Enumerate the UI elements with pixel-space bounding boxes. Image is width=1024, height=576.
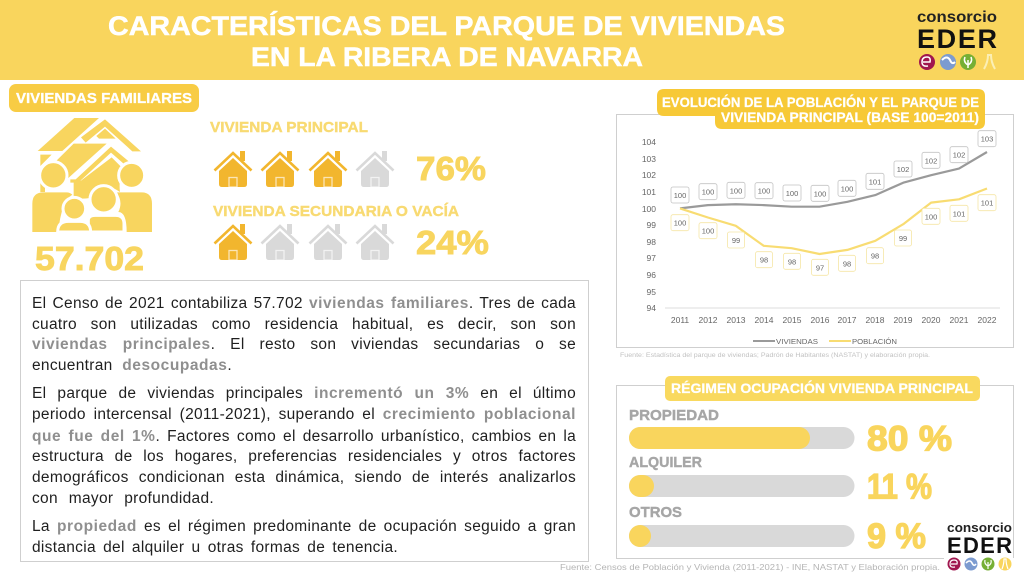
header band	[0, 0, 1024, 80]
bar: alquiler: 11 %	[867, 468, 932, 506]
data labels: viviendas: 100	[674, 191, 686, 200]
label: vivienda secundaria: VIVIENDA SECUNDARIA O VACÍA	[213, 203, 459, 220]
data labels: viviendas: 100	[841, 184, 853, 193]
x axis labels: 2018	[866, 315, 885, 325]
paragraph 2: que fue del 1%. Factores como el desarrollo urbanístico, cambios en la	[32, 428, 576, 445]
chart heading badge	[657, 89, 985, 129]
bar: alquiler: ALQUILER	[629, 454, 702, 471]
y axis labels: 99	[647, 220, 656, 230]
label: vivienda principal: VIVIENDA PRINCIPAL	[210, 119, 368, 136]
badge: viviendas familiares	[9, 84, 199, 112]
data labels: viviendas: 100	[786, 189, 798, 198]
data labels: poblacion: 98	[871, 252, 879, 261]
y axis labels: 96	[647, 270, 656, 280]
paragraph 1: viviendas principales. El resto son viviendas secundarias o se	[32, 336, 576, 353]
paragraph 1	[32, 295, 576, 374]
paragraph 2: con mayor profundidad.	[32, 490, 214, 507]
x axis labels: 2015	[783, 315, 802, 325]
bar: otros: 9 %	[867, 517, 926, 556]
data labels: poblacion: 97	[816, 263, 824, 272]
legend: POBLACIÓN	[852, 337, 897, 346]
line: viviendas	[680, 152, 987, 208]
icons: secondary houses 1 of 4	[214, 224, 394, 260]
regimen heading badge	[665, 376, 980, 401]
value 76%: 76%	[416, 150, 486, 187]
paragraph 3: La propiedad es el régimen predominante de ocupación seguido a gran	[32, 518, 576, 535]
data labels: poblacion: 100	[925, 212, 937, 221]
logo: consorcio EDER footer: EDER	[947, 533, 1012, 558]
y axis labels: 103	[642, 154, 656, 164]
title: EN LA RIBERA DE NAVARRA	[251, 42, 643, 72]
x axis labels: 2020	[922, 315, 941, 325]
logo: consorcio EDER footer	[944, 520, 1014, 575]
y axis labels	[642, 137, 656, 313]
y axis labels: 98	[647, 237, 656, 247]
panel: line chart	[616, 89, 1014, 348]
data labels: viviendas: 103	[981, 135, 993, 144]
data labels: viviendas: 102	[897, 165, 909, 174]
value 24%: 24%	[416, 224, 489, 261]
paragraph 1: cuatro son utilizadas como residencia habitual, es decir, son son	[32, 316, 576, 333]
paragraph 2: periodo intercensal (2011-2021), superando el crecimiento poblacional	[32, 406, 576, 423]
data labels: viviendas: 101	[869, 177, 881, 186]
paragraph 3	[32, 518, 576, 556]
data labels: poblacion: 101	[953, 209, 965, 218]
bar: otros	[629, 504, 926, 556]
x axis labels: 2022	[978, 315, 997, 325]
data labels: poblacion: 98	[788, 257, 796, 266]
paragraph 2: El parque de viviendas principales incrementó un 3% en el último	[32, 385, 576, 402]
y axis labels: 104	[642, 137, 656, 147]
chart heading badge: VIVIENDA PRINCIPAL (BASE 100=2011)	[721, 110, 979, 125]
data labels: viviendas: 100	[730, 186, 742, 195]
data labels: viviendas: 100	[702, 188, 714, 197]
data labels: poblacion: 98	[760, 256, 768, 265]
x axis labels: 2014	[755, 315, 774, 325]
data labels: poblacion: 100	[702, 227, 714, 236]
x axis labels: 2012	[699, 315, 718, 325]
panel: regimen de ocupacion	[616, 376, 1014, 558]
data labels: viviendas: 100	[758, 187, 770, 196]
bar: propiedad: PROPIEDAD	[629, 407, 719, 424]
logo: consorcio EDER footer: consorcio	[947, 521, 1012, 535]
big number 57.702: 57.702	[35, 240, 144, 277]
y axis labels: 100	[642, 204, 656, 214]
badge: viviendas familiares: VIVIENDAS FAMILIARES	[16, 91, 192, 107]
data labels: viviendas	[671, 131, 996, 203]
panel: body text	[20, 280, 589, 562]
data labels: viviendas: 102	[953, 151, 965, 160]
paragraph 2: demográficos condicionan esta dinámica, siendo de interés analizarlos	[32, 469, 576, 486]
regimen heading badge: RÉGIMEN OCUPACIÓN VIVIENDA PRINCIPAL	[671, 381, 973, 396]
bar: propiedad	[629, 407, 952, 458]
data labels: viviendas: 102	[925, 156, 937, 165]
data labels: poblacion: 98	[843, 259, 851, 268]
x axis labels: 2016	[811, 315, 830, 325]
paragraph 2	[32, 385, 576, 507]
paragraph 1: encuentran desocupadas.	[32, 357, 232, 374]
icon: family and houses	[32, 118, 152, 232]
x axis labels: 2013	[727, 315, 746, 325]
x axis labels: 2019	[894, 315, 913, 325]
data labels: poblacion	[671, 195, 996, 275]
title	[108, 10, 785, 72]
data labels: poblacion: 99	[732, 236, 740, 245]
data labels: poblacion: 101	[981, 199, 993, 208]
logo: consorcio EDER header: EDER	[917, 24, 997, 54]
logo: consorcio EDER header	[917, 9, 997, 70]
data labels: viviendas: 100	[814, 189, 826, 198]
paragraph 2: estructura de los hogares, preferencias residenciales y otros factores	[32, 448, 576, 465]
y axis labels: 102	[642, 170, 656, 180]
data labels: poblacion: 99	[899, 234, 907, 243]
chart source: Fuente: Estadística del parque de viviendas; Padrón de Habitantes (NASTAT) y elaboración propia.	[620, 352, 930, 359]
bar: otros: OTROS	[629, 504, 682, 521]
y axis labels: 101	[642, 187, 656, 197]
data labels: poblacion: 100	[674, 219, 686, 228]
footer source: Fuente: Censos de Población y Vivienda (2011-2021) - INE, NASTAT y Elaboración propia.	[560, 562, 940, 572]
y axis labels: 94	[647, 303, 656, 313]
title: CARACTERÍSTICAS DEL PARQUE DE VIVIENDAS	[108, 10, 785, 41]
logo: consorcio EDER header: consorcio	[917, 9, 997, 26]
x axis labels: 2011	[671, 315, 689, 325]
x axis labels	[671, 315, 997, 325]
bar: propiedad: 80 %	[867, 420, 952, 458]
x axis labels: 2017	[838, 315, 857, 325]
y axis labels: 97	[647, 253, 656, 263]
bar: alquiler	[629, 454, 932, 506]
y axis labels: 95	[647, 287, 656, 297]
legend	[753, 337, 897, 346]
chart heading badge: EVOLUCIÓN DE LA POBLACIÓN Y EL PARQUE DE	[662, 95, 979, 110]
legend: VIVIENDAS	[776, 337, 818, 346]
paragraph 3: distancia del alquiler u otras formas de tenencia.	[32, 539, 398, 556]
x axis labels: 2021	[950, 315, 969, 325]
line: poblacion	[680, 188, 987, 254]
paragraph 1: El Censo de 2021 contabiliza 57.702 viviendas familiares. Tres de cada	[32, 295, 576, 312]
icons: principal houses 3 of 4	[214, 151, 394, 187]
